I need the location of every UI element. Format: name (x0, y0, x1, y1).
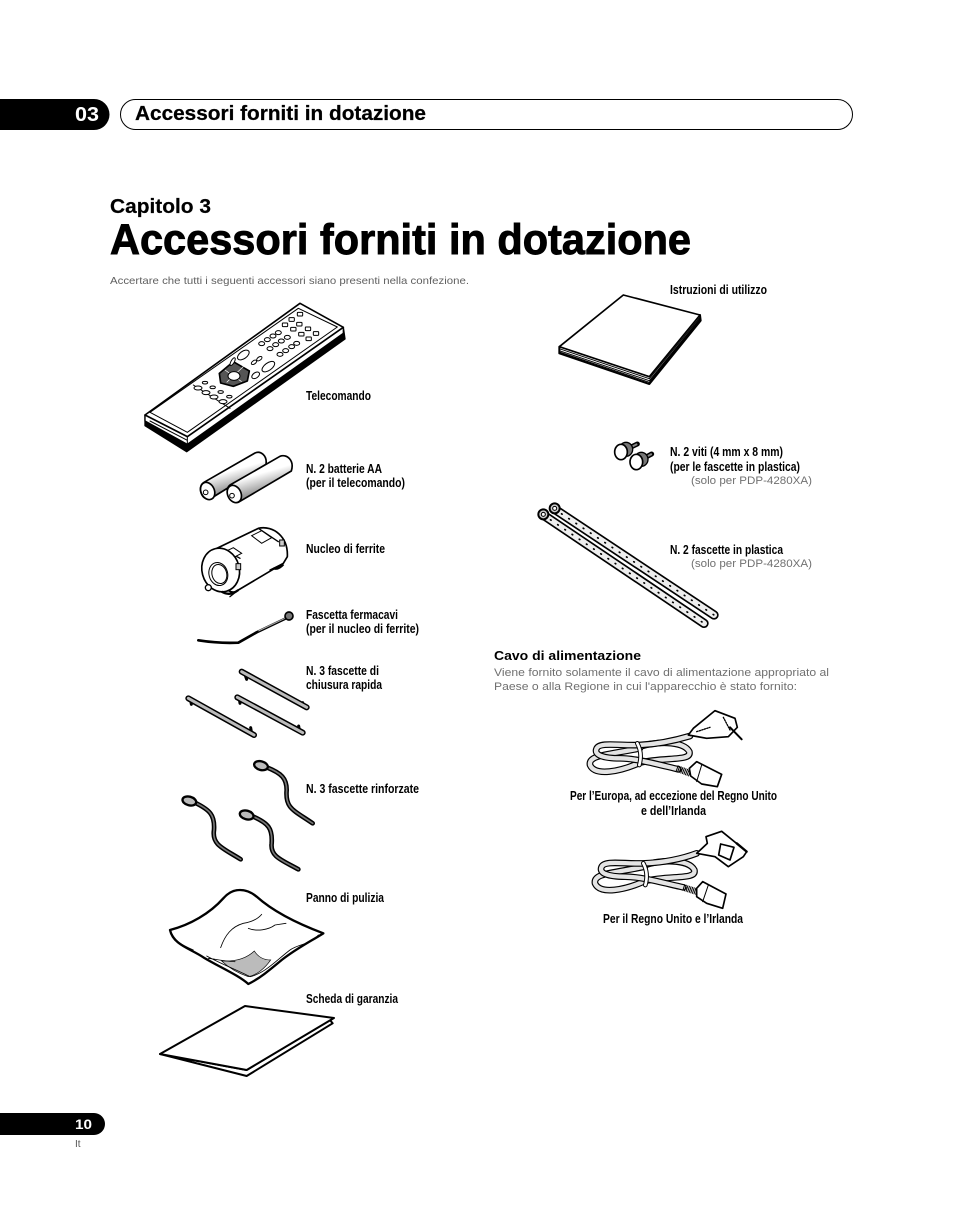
chapter number tab: 03 (75, 104, 99, 126)
label: viti: (per le fascette in plastica) (670, 459, 800, 474)
icon: ferrite core (197, 528, 287, 597)
label: fascette di chiusura rapida: chiusura rapida (306, 677, 383, 692)
intro text: Accertare che tutti i seguenti accessori siano presenti nella confezione. (110, 275, 469, 287)
icon: instruction manual (559, 295, 701, 384)
page number tab: 10 (75, 1116, 92, 1132)
label: Istruzioni di utilizzo: Istruzioni di utilizzo (670, 282, 767, 297)
label: fascette in plastica: (solo per PDP-4280XA) (691, 558, 812, 570)
label: cavo Europa (570, 788, 777, 818)
label: Panno di pulizia: Panno di pulizia (306, 890, 385, 905)
icon: cable tie (198, 612, 293, 643)
icon: screws (615, 442, 652, 470)
label: batterie (306, 461, 405, 490)
main title: Accessori forniti in dotazione (110, 216, 691, 264)
icon: European power cord (590, 711, 742, 787)
icon: quick fasteners (188, 672, 307, 735)
label: fascette di chiusura rapida: N. 3 fascette di (306, 663, 379, 678)
icon: warranty card (160, 1006, 334, 1076)
label: fascette in plastica (670, 542, 812, 570)
label: Fascetta fermacavi (306, 607, 419, 636)
chapter label: Capitolo 3 (110, 195, 211, 218)
label: Scheda di garanzia: Scheda di garanzia (306, 991, 399, 1006)
header title bar: Accessori forniti in dotazione (135, 102, 426, 125)
label: Fascetta fermacavi: (per il nucleo di ferrite) (306, 621, 419, 636)
power cord description: Paese o alla Regione in cui l'apparecchio è stato fornito: (494, 681, 797, 693)
label: Fascetta fermacavi: Fascetta fermacavi (306, 607, 398, 622)
icon: UK power cord (595, 831, 747, 908)
power cord description (494, 667, 829, 693)
label: batterie: N. 2 batterie AA (306, 461, 382, 476)
header title bar (120, 100, 852, 130)
label: Nucleo di ferrite: Nucleo di ferrite (306, 541, 385, 556)
icon: cleaning cloth (170, 890, 323, 984)
label: fascette rinforzate: N. 3 fascette rinforzate (306, 781, 419, 796)
icon: plastic straps (538, 503, 714, 623)
chapter number tab (0, 99, 110, 130)
label: cavo Europa: e dell’Irlanda (641, 803, 707, 818)
label: viti: (solo per PDP-4280XA) (691, 475, 812, 487)
page number tab (0, 1113, 105, 1135)
icon: remote control (145, 303, 345, 452)
label: viti: N. 2 viti (4 mm x 8 mm) (670, 444, 783, 459)
label: fascette di chiusura rapida (306, 663, 383, 692)
label: cavo Europa: Per l’Europa, ad eccezione del Regno Unito (570, 788, 777, 803)
label: batterie: (per il telecomando) (306, 475, 405, 490)
label: viti (670, 444, 812, 487)
icon: reinforced ties (181, 760, 313, 869)
label: fascette in plastica: N. 2 fascette in plastica (670, 542, 784, 557)
label: cavo Regno Unito: Per il Regno Unito e l’Irlanda (603, 911, 744, 926)
label: Telecomando: Telecomando (306, 388, 371, 403)
icon: batteries (198, 452, 292, 505)
power cord heading: Cavo di alimentazione (494, 648, 641, 663)
power cord description: Viene fornito solamente il cavo di alimentazione appropriato al (494, 667, 829, 679)
language code: It (75, 1139, 81, 1150)
